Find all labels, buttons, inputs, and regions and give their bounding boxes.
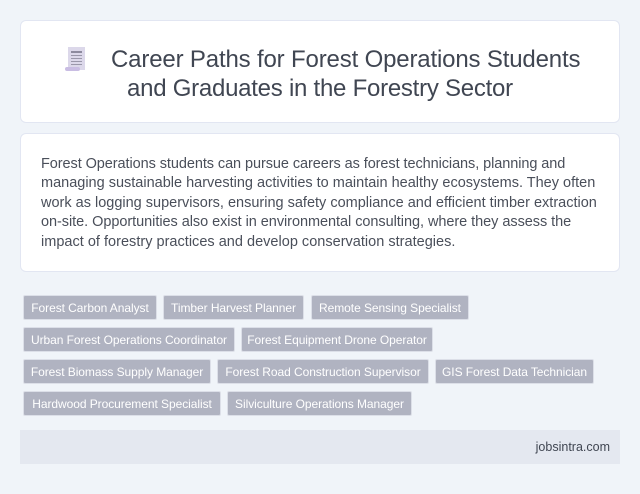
tag list: GIS Forest Data Technician [442, 365, 587, 379]
tag list: Forest Equipment Drone Operator [247, 333, 427, 347]
description text: managing sustainable harvesting activities to maintain healthy ecosystems. They often [41, 175, 595, 191]
footer source text: jobsintra.com [536, 440, 610, 454]
tag list: Forest Road Construction Supervisor [225, 365, 421, 379]
panel: title card [20, 20, 620, 123]
tag list: Timber Harvest Planner [171, 301, 296, 315]
tag list: Hardwood Procurement Specialist [32, 397, 212, 411]
description text: on-site. Opportunities also exist in environmental consulting, where they assess the [41, 214, 571, 230]
icon: document scroll [65, 47, 85, 71]
tag list: Silviculture Operations Manager [235, 397, 404, 411]
tag list: Forest Biomass Supply Manager [31, 365, 203, 379]
description text [41, 156, 597, 250]
title line 1: Career Paths for Forest Operations Students [111, 46, 580, 73]
panel: description [20, 133, 620, 272]
tag list: Urban Forest Operations Coordinator [31, 333, 227, 347]
description text: work as logging supervisors, ensuring safety compliance and efficient timber extraction [41, 195, 597, 211]
description text: impact of forestry practices and develop conservation strategies. [41, 234, 455, 250]
title line 2: and Graduates in the Forestry Sector [127, 75, 513, 102]
footer bar [20, 430, 620, 464]
tag list: Forest Carbon Analyst [31, 301, 149, 315]
tag list: Remote Sensing Specialist [319, 301, 461, 315]
tag list [23, 295, 594, 416]
description text: Forest Operations students can pursue careers as forest technicians, planning and [41, 156, 565, 172]
